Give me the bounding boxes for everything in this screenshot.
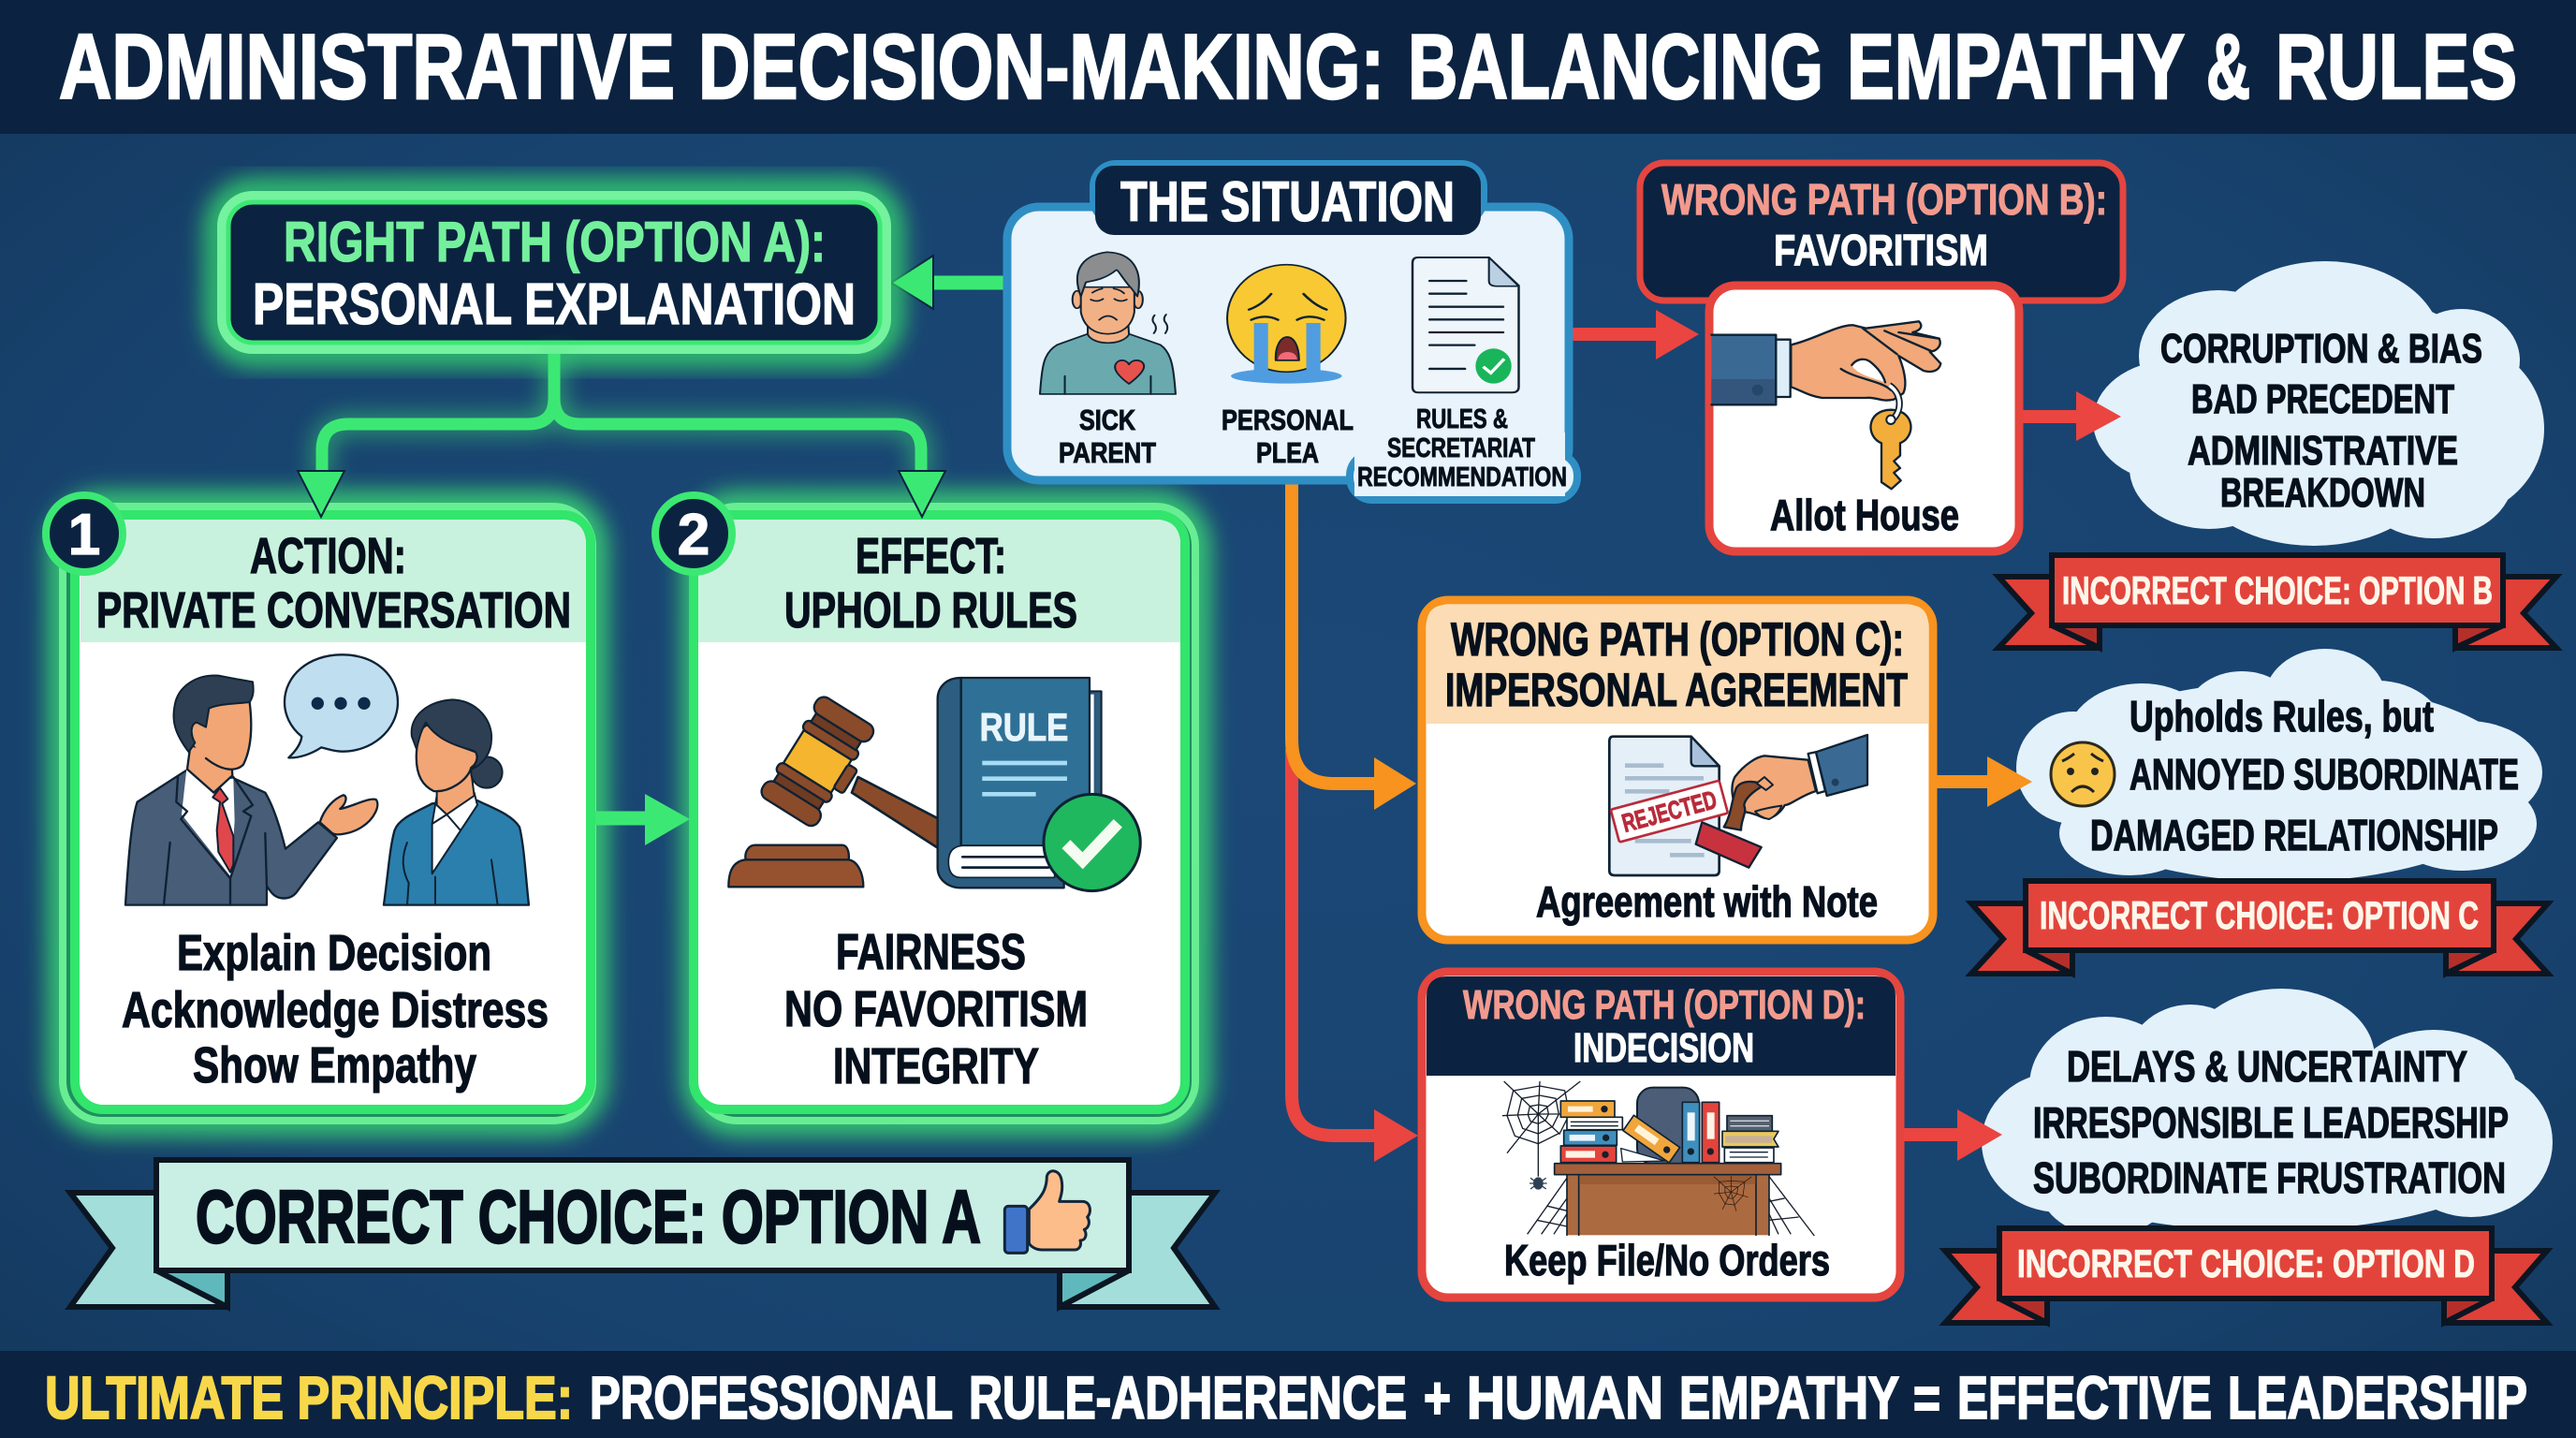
action details: Explain Decision [177,925,491,981]
icon: two people talking [125,654,529,905]
action details: Acknowledge Distress [122,982,549,1038]
title banner [0,0,2576,134]
icon: dusty desk with files and cobwebs [1502,1081,1814,1236]
action subheading: PRIVATE CONVERSATION [96,582,571,638]
icon: document with check [1412,257,1518,392]
footer: ultimate principle: HUMAN [1467,1364,1663,1431]
arrow: option D to cloud [1904,1109,2002,1161]
icon: worried face [2051,742,2115,806]
caption: allot house: Allot House [1770,491,1959,539]
cloud: option B consequences: ADMINISTRATIVE [2188,428,2458,474]
ribbon: incorrect choice option B [1998,555,2556,648]
icon: gavel and rule book: RULE [980,705,1068,749]
label: personal plea: PLEA [1256,436,1319,469]
title banner: EMPATHY [1847,15,2185,118]
effect details: INTEGRITY [833,1038,1039,1094]
panel: option D card [1422,972,1900,1298]
cloud: option B consequences: BREAKDOWN [2220,470,2425,516]
action details: Show Empathy [193,1037,476,1093]
panel: the situation [1007,160,1577,500]
arrow: option C to cloud [1937,756,2032,807]
panel: option C card [1422,600,1933,940]
label: rules and recommendation: RULES & [1416,404,1508,434]
footer: ultimate principle: PROFESSIONAL [590,1364,953,1431]
cloud: option B consequences [2093,261,2544,546]
panel: action card [61,505,594,1123]
icon: rejected document stamp [1609,735,1867,875]
footer: ultimate principle: + [1424,1364,1451,1431]
number badge 1 [46,495,123,572]
effect details [784,924,1088,1094]
footer: ultimate principle: RULE-ADHERENCE [969,1364,1407,1431]
cloud: option D consequences [1982,989,2553,1236]
arrowheads into action and effect [298,471,945,517]
icon: crying face [1227,265,1346,384]
label: rules and recommendation: SECRETARIAT [1387,433,1535,463]
caption: keep file no orders: Keep File/No Orders [1504,1236,1830,1284]
number badge 1: 1 [68,503,100,567]
arrow: situation down to option D [1292,749,1418,1162]
arrow: situation to right path [891,256,1006,309]
footer: ultimate principle: = [1913,1364,1940,1431]
footer: ultimate principle [0,1351,2576,1438]
label: rules and recommendation: RECOMMENDATION [1357,462,1567,492]
action heading: ACTION: [250,528,406,584]
panel: effect card [694,505,1197,1123]
icon: thumbs up [1004,1171,1090,1253]
ribbon: incorrect choice option C [1971,881,2548,974]
option C heading [1445,613,1908,716]
option C heading: WRONG PATH (OPTION C): [1451,613,1904,666]
label: sick parent: SICK [1079,404,1135,436]
cloud: option B consequences: BAD PRECEDENT [2191,376,2454,422]
effect heading: EFFECT: [856,528,1006,584]
effect subheading: UPHOLD RULES [784,582,1077,638]
title banner: ADMINISTRATIVE [59,15,675,118]
footer: ultimate principle: EFFECTIVE [1957,1364,2212,1431]
situation icons [1040,252,1518,394]
label: rules and recommendation [1357,404,1567,492]
ribbon: correct choice: CORRECT CHOICE: OPTION A [196,1175,981,1258]
panel: option B card [1709,286,2019,551]
option D heading: WRONG PATH (OPTION D): [1463,982,1866,1028]
effect details: NO FAVORITISM [784,981,1088,1037]
effect details: FAIRNESS [836,924,1026,980]
option D heading: INDECISION [1573,1025,1754,1071]
title banner: DECISION-MAKING: [698,15,1384,118]
icon: gavel and rule book [728,678,1140,891]
ribbon: incorrect choice option D [1945,1228,2547,1323]
number badge 2 [655,495,732,572]
panel: option B heading: WRONG PATH (OPTION B): [1661,175,2107,224]
icon: sick parent [1040,252,1176,394]
label: sick parent: PARENT [1059,436,1156,469]
cloud: option B consequences: CORRUPTION & BIAS [2160,326,2482,372]
arrow: action to effect [595,794,690,845]
icon: hand holding key [1711,321,1940,489]
arrow: situation down to option C [1292,484,1416,810]
option D heading [1463,982,1866,1071]
caption: agreement with note: Agreement with Note [1536,877,1878,926]
footer: ultimate principle: ULTIMATE PRINCIPLE: [45,1364,573,1431]
action details [122,925,549,1093]
arrow: option B to cloud [2023,391,2121,441]
label: personal plea: PERSONAL [1222,404,1354,436]
panel: option B heading: FAVORITISM [1774,226,1988,274]
number badge 2: 2 [678,503,710,567]
branching arrows to action and effect [322,354,921,479]
panel: right path heading [217,191,891,354]
panel: right path heading: PERSONAL EXPLANATION [253,272,856,337]
icon: rejected document stamp: REJECTED [1618,785,1720,838]
title banner: & [2206,15,2250,118]
footer: ultimate principle: EMPATHY [1679,1364,1899,1431]
panel: right path heading: RIGHT PATH (OPTION A): [284,211,826,273]
option C heading: IMPERSONAL AGREEMENT [1445,664,1908,716]
situation heading: THE SITUATION [1120,170,1455,233]
cloud: option C consequences: Upholds Rules, but [2130,692,2434,741]
arrow: situation to option B [1572,310,1699,360]
cloud: option C consequences [2016,649,2542,882]
panel: option B heading [1640,163,2123,301]
ribbon: correct choice [70,1160,1215,1307]
title banner: BALANCING [1408,15,1823,118]
label: personal plea [1222,404,1354,469]
label: sick parent [1059,404,1156,469]
